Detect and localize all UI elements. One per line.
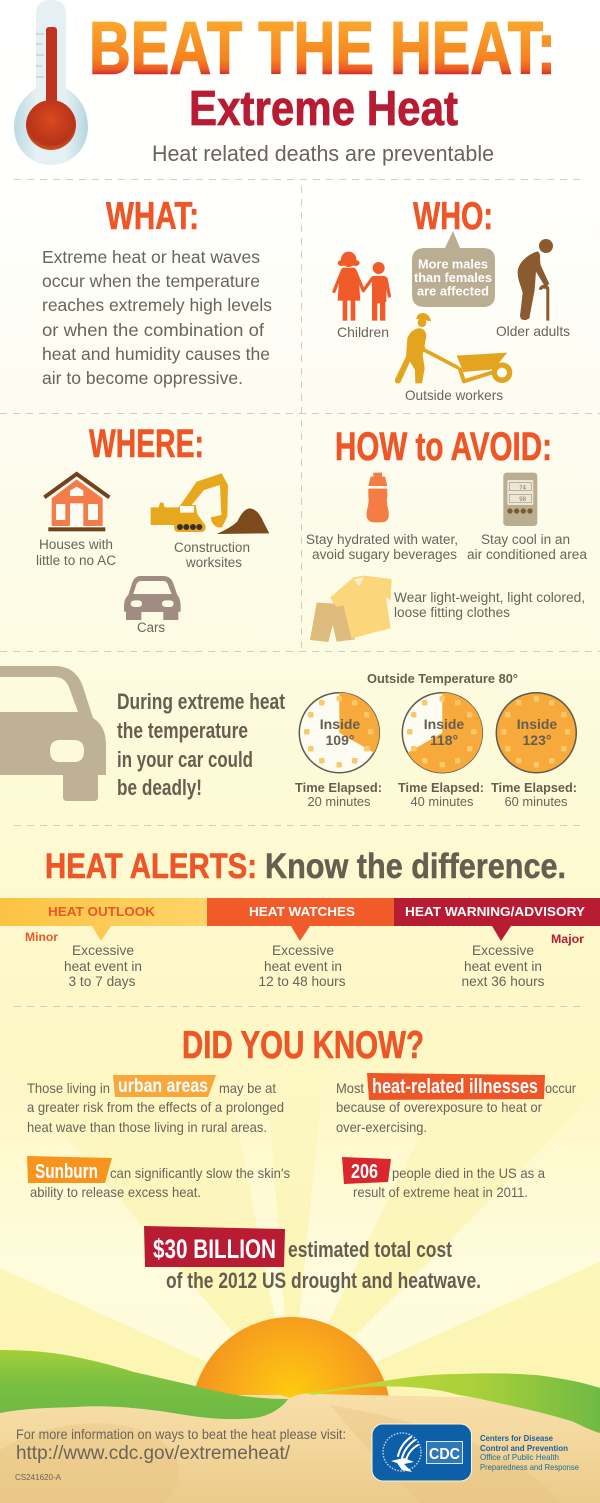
fact: heat-related illnesses: heat-related illnesses (372, 1076, 538, 1098)
panel: did you know (27, 1024, 576, 1293)
car warning text: During extreme heat (117, 689, 286, 714)
heading: where: WHERE: (89, 422, 204, 466)
alert: heat warning (394, 898, 600, 989)
fact: heat-related illnesses (336, 1073, 576, 1135)
label: clothes: loose fitting clothes (394, 605, 510, 620)
clock: 20 minutes (299, 693, 379, 773)
label: outside temperature: Outside Temperature 80° (367, 672, 518, 686)
left green hill (0, 1350, 288, 1419)
icon: house (44, 474, 109, 531)
ground (0, 1394, 600, 1503)
fact: heat-related illnesses: over-exercising. (336, 1119, 427, 1135)
label: stay hydrated: Stay hydrated with water, (306, 532, 458, 547)
fact: sunburn: ability to release excess heat. (30, 1184, 201, 1200)
sunrise landscape (0, 1317, 600, 1503)
label: construction worksites: worksites (185, 555, 242, 570)
fact: heat-related illnesses: occur (545, 1080, 576, 1096)
CDC organisation text (480, 1433, 579, 1472)
subtitle: Extreme Heat: Extreme Heat (189, 82, 458, 136)
label: houses: little to no AC (36, 553, 116, 568)
icon: thermostat: 74 (519, 485, 527, 491)
CDC organisation text: Centers for Disease (480, 1433, 553, 1443)
what description: heat and humidity causes the (42, 344, 270, 364)
panel: heat alerts (0, 847, 600, 989)
thermometer icon (14, 0, 88, 165)
what description: occur when the temperature (42, 271, 260, 291)
panel: what (42, 195, 272, 388)
caption: 20 minutes: Time Elapsed: (295, 780, 382, 795)
what description: or when the combination of (42, 320, 264, 340)
label: minor: Minor (25, 932, 59, 944)
label: houses (36, 537, 116, 568)
label: major: Major (551, 934, 585, 946)
alert: heat outlook: Excessive (72, 942, 134, 958)
heading: heat alerts: HEAT ALERTS: (45, 847, 257, 886)
label: clothes: Wear light-weight, light colored, (394, 590, 585, 605)
car warning text: the temperature (117, 718, 248, 743)
alert: heat outlook: HEAT OUTLOOK (48, 904, 156, 919)
icon: outside worker (395, 313, 510, 383)
icon: thermostat: 98 (519, 497, 527, 503)
alert: heat outlook (0, 898, 207, 989)
what description: air to become oppressive. (42, 368, 243, 388)
icon: large car (0, 666, 106, 801)
fact: urban areas: Those living in (27, 1080, 110, 1096)
caption: 40 minutes: 40 minutes (410, 794, 474, 809)
sun (191, 1317, 391, 1503)
panel: where (36, 422, 269, 635)
clock: 60 minutes: 123° (523, 732, 551, 748)
speech bubble: than females (414, 271, 492, 285)
fact: sunburn: Sunburn (35, 1161, 98, 1183)
heading: heat alerts (45, 847, 566, 886)
panel: who (334, 195, 570, 403)
label: construction worksites: Construction (174, 540, 250, 555)
fact: 206 deaths (342, 1157, 545, 1200)
footer link text (15, 1427, 346, 1482)
footer link text: CS241620-A (15, 1472, 61, 1482)
icon: clothes (310, 576, 392, 642)
icon: older adult (518, 239, 553, 321)
label: stay hydrated (306, 532, 458, 562)
CDC organisation text: Preparedness and Response (480, 1462, 579, 1472)
alert: heat watches: heat event in (264, 958, 342, 974)
car warning text: be deadly! (117, 775, 202, 800)
clock: 60 minutes: Inside (517, 716, 557, 732)
fact: urban areas: may be at (219, 1080, 276, 1096)
tagline: Heat related deaths are preventable (152, 141, 494, 166)
label: children: Children (337, 324, 389, 340)
fact: urban areas (27, 1075, 284, 1135)
icon: car (124, 576, 181, 620)
panel: hot car (0, 666, 577, 809)
alert: heat watches: 12 to 48 hours (258, 973, 346, 989)
CDC logo: CDC (429, 1446, 460, 1463)
fact: urban areas: urban areas (118, 1076, 208, 1097)
label: houses: Houses with (39, 537, 113, 552)
speech bubble (412, 231, 495, 307)
fact: 30 billion: estimated total cost (288, 1237, 453, 1262)
clock: 20 minutes: 109° (326, 732, 354, 748)
fact: heat-related illnesses: Most (336, 1080, 364, 1096)
label: stay cool: Stay cool in an (481, 532, 570, 547)
icon: thermostat (503, 473, 537, 526)
icon: water bottle (367, 473, 389, 522)
alert: heat watches (207, 898, 394, 989)
label: stay cool (467, 532, 587, 562)
label: outside workers: Outside workers (405, 387, 503, 403)
heading: what: WHAT: (106, 195, 199, 238)
clock: 40 minutes (402, 693, 482, 773)
what description: reaches extremely high levels (42, 295, 272, 315)
fact: 206 deaths: 206 (351, 1161, 378, 1183)
clock: 40 minutes: 118° (430, 732, 458, 748)
CDC logo (372, 1424, 472, 1481)
alert: heat watches: HEAT WATCHES (249, 904, 355, 919)
clock: 60 minutes (496, 693, 576, 773)
caption: 60 minutes (491, 780, 577, 809)
fact: 30 billion: of the 2012 US drought and heatwave. (166, 1268, 481, 1293)
icon: excavator (151, 473, 269, 534)
label: older adults: Older adults (496, 323, 570, 339)
fact: urban areas: a greater risk from the effects of a prolonged (27, 1099, 284, 1115)
caption: 40 minutes (398, 780, 484, 809)
label: construction worksites (174, 540, 250, 570)
fact: 30 billion: $30 BILLION (153, 1234, 276, 1264)
label: cars: Cars (137, 620, 165, 635)
caption: 20 minutes: 20 minutes (308, 794, 371, 809)
caption: 60 minutes: 60 minutes (504, 794, 568, 809)
label: stay cool: air conditioned area (467, 547, 587, 562)
caption: 60 minutes: Time Elapsed: (491, 780, 577, 795)
fact: sunburn (27, 1156, 290, 1200)
alert: heat warning: HEAT WARNING/ADVISORY (405, 904, 585, 919)
clock: 40 minutes: Inside (424, 716, 464, 732)
fact: heat-related illnesses: because of overexposure to heat or (336, 1099, 542, 1115)
fact: 206 deaths: result of extreme heat in 2011. (353, 1184, 528, 1200)
right green hill (304, 1373, 600, 1433)
clock: 20 minutes: Inside (320, 716, 360, 732)
icon: children (334, 252, 389, 321)
label: clothes (394, 590, 585, 620)
fact: sunburn: can significantly slow the skin's (110, 1165, 290, 1181)
CDC organisation text: Control and Prevention (480, 1443, 568, 1453)
footer link text: http://www.cdc.gov/extremeheat/ (16, 1442, 291, 1464)
car warning text: in your car could (117, 747, 253, 772)
CDC organisation text: Office of Public Health (480, 1452, 559, 1462)
heading: who: WHO: (413, 195, 493, 238)
heading: heat alerts: Know the difference. (265, 847, 566, 886)
speech bubble: are affected (417, 284, 489, 298)
what description (42, 247, 272, 388)
fact: urban areas: heat wave than those living in rural areas. (27, 1119, 267, 1135)
speech bubble: More males (418, 258, 488, 272)
alert: heat warning: Excessive (472, 942, 534, 958)
alert: heat warning: heat event in (464, 958, 542, 974)
alert: heat warning: next 36 hours (462, 973, 544, 989)
car warning text (117, 689, 286, 800)
alert: heat watches: Excessive (272, 942, 334, 958)
caption: 20 minutes (295, 780, 382, 809)
heading: did you know: DID YOU KNOW? (182, 1024, 424, 1067)
fact: 206 deaths: people died in the US as a (392, 1165, 545, 1181)
what description: Extreme heat or heat waves (42, 247, 260, 267)
alert: heat outlook: heat event in (64, 958, 142, 974)
panel: how to avoid (306, 425, 587, 642)
fact: 30 billion (144, 1226, 481, 1293)
footer link text: For more information on ways to beat the heat please visit: (16, 1427, 346, 1442)
caption: 40 minutes: Time Elapsed: (398, 780, 484, 795)
sun rays background (0, 1010, 600, 1400)
label: stay hydrated: avoid sugary beverages (312, 547, 457, 562)
alert: heat outlook: 3 to 7 days (68, 973, 136, 989)
